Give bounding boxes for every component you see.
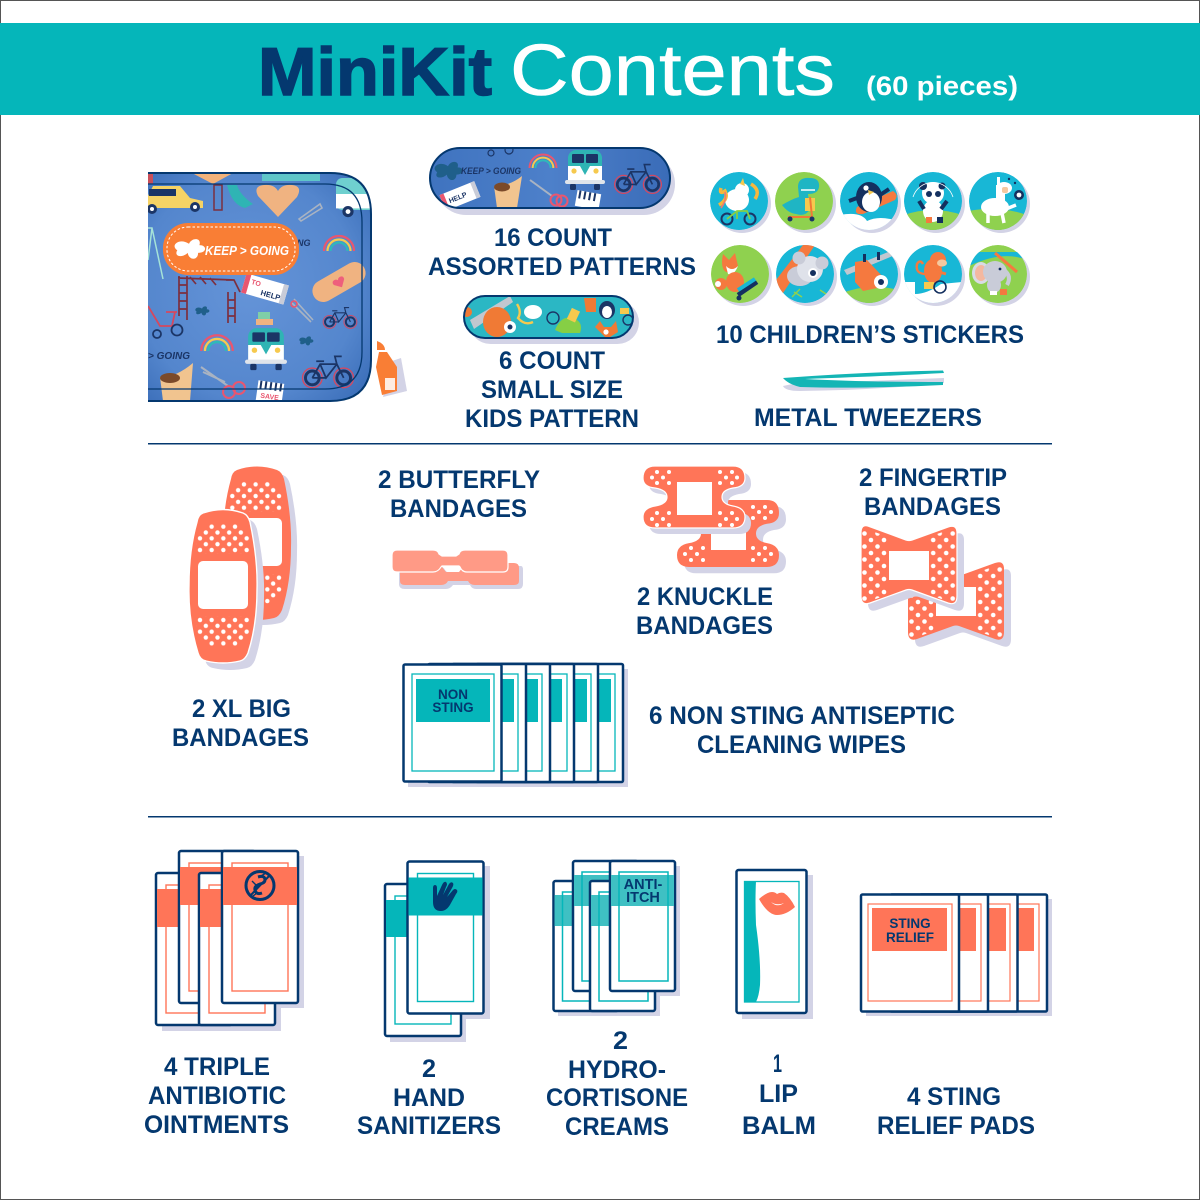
sticker: llama <box>969 172 1030 233</box>
relief pad 2 <box>890 894 988 1012</box>
label: 2 hand sanitizers: 2 <box>422 1055 436 1083</box>
label: 6 count small size kids pattern: 6 COUNT <box>499 347 605 375</box>
pouch pattern: bandage heart <box>256 185 299 217</box>
pouch stitch line <box>148 184 362 389</box>
label: 2 knuckle bandages: BANDAGES <box>636 612 773 640</box>
cream packet 3 <box>590 881 655 1011</box>
label: 2 hydrocortisone creams <box>546 1027 688 1141</box>
header banner <box>0 23 1200 115</box>
pouch pattern: save sign: SAVE <box>260 393 279 402</box>
pouch pattern: safety pins <box>291 204 322 322</box>
pouch pattern: rainbow lower <box>201 335 233 351</box>
label: 2 XL big bandages <box>172 695 309 752</box>
wipe packet 2 <box>428 664 526 782</box>
sticker: elephant <box>969 245 1030 306</box>
label: 2 knuckle bandages: 2 KNUCKLE <box>637 583 773 611</box>
label: 2 hydrocortisone creams: CREAMS <box>565 1113 669 1141</box>
icon: lip balm <box>736 870 813 1019</box>
sticker: unicorn <box>710 172 771 233</box>
icon: butterfly bandages <box>392 550 523 589</box>
label: 6 non sting antiseptic cleaning wipes <box>649 702 955 759</box>
pouch orange label <box>163 223 299 275</box>
kit pouch illustration <box>147 173 376 404</box>
wipe packet front: STING <box>432 700 474 715</box>
pouch pattern: bicycle <box>303 356 353 388</box>
pouch pattern: yellow car <box>147 186 203 214</box>
pouch pattern: van with luggage <box>245 312 287 370</box>
label: 4 triple antibiotic ointments <box>144 1053 289 1139</box>
title: MiniKit: MiniKit <box>258 34 492 110</box>
cream packet 4 <box>610 861 675 991</box>
pouch pattern: roll of paper <box>160 363 193 401</box>
label: 2 fingertip bandages: 2 FINGERTIP <box>859 464 1007 492</box>
label: 4 sting relief pads: 4 STING <box>907 1083 1001 1111</box>
label: 2 hydrocortisone creams: HYDRO- <box>568 1056 666 1084</box>
wipe packet 3 <box>452 664 550 782</box>
label: 4 sting relief pads <box>877 1083 1035 1140</box>
stickers grid <box>710 172 1030 306</box>
label: 6 non sting antiseptic cleaning wipes: CLEANING WIPES <box>697 731 906 759</box>
label: 2 hydrocortisone creams: 2 <box>613 1027 628 1055</box>
title: piece count: (60 pieces) <box>866 71 1018 101</box>
ointment packet 4 <box>222 851 298 1003</box>
label: 6 count small size kids pattern <box>465 347 639 433</box>
sanitizer packet front <box>408 862 484 1014</box>
relief pad 4 <box>949 894 1047 1012</box>
relief pad front <box>861 894 959 1012</box>
pouch pattern: rainbow <box>324 236 354 251</box>
icon: hand <box>433 882 457 911</box>
sticker: fox <box>711 245 772 306</box>
label: 2 hand sanitizers: HAND <box>393 1084 465 1112</box>
icon: knuckle bandages <box>643 466 786 573</box>
icon: XL bandages <box>189 466 297 670</box>
wipe packet 6 <box>524 664 623 782</box>
label: 10 children's stickers: 10 CHILDREN’S STICKERS <box>716 321 1024 349</box>
wipe packet 4 <box>476 664 574 782</box>
icon: ointment tube <box>376 341 407 397</box>
bandage: 6 count kids pattern <box>462 296 639 344</box>
label: 6 count small size kids pattern: KIDS PATTERN <box>465 405 639 433</box>
label: 16 count assorted patterns: 16 COUNT <box>494 224 612 252</box>
cream packet 2 <box>573 861 638 991</box>
label: 1 lip balm: 1 <box>773 1050 782 1078</box>
relief pad front: RELIEF <box>886 930 934 945</box>
label: 16 count assorted patterns <box>428 224 696 281</box>
wipe packet front <box>404 664 502 782</box>
label: metal tweezers: METAL TWEEZERS <box>754 404 982 432</box>
title: Contents: Contents <box>510 31 835 111</box>
icon: antiseptic wipes stack <box>404 664 628 787</box>
label: 2 hand sanitizers <box>357 1055 501 1140</box>
relief pad front: STING <box>889 916 931 931</box>
label: 2 knuckle bandages <box>636 583 773 640</box>
label: 4 triple antibiotic ointments: OINTMENTS <box>144 1111 289 1139</box>
label: 6 non sting antiseptic cleaning wipes: 6 NON STING ANTISEPTIC <box>649 702 955 730</box>
pouch pattern: scissors <box>201 367 245 398</box>
pouch pattern: designed to help sign: HELP <box>260 288 281 302</box>
label: 6 count small size kids pattern: SMALL SIZE <box>481 376 623 404</box>
label: 2 fingertip bandages: BANDAGES <box>864 493 1001 521</box>
bandage: 16 count assorted: HELP <box>448 192 468 205</box>
pouch pattern: monkey bars <box>178 276 240 323</box>
pouch pattern: going text: > GOING <box>148 350 190 362</box>
pouch pattern: designed to help sign <box>241 273 289 305</box>
ointment packet 2 <box>179 851 255 1003</box>
sticker: panda <box>904 172 965 233</box>
sticker: koala <box>776 245 837 306</box>
label: 4 triple antibiotic ointments: ANTIBIOTIC <box>148 1082 286 1110</box>
relief pad 3 <box>920 894 1018 1012</box>
label: 1 lip balm: BALM <box>742 1112 816 1140</box>
icon: triple antibiotic ointments <box>156 851 304 1031</box>
label: 2 butterfly bandages: 2 BUTTERFLY <box>378 466 540 494</box>
label: 2 hydrocortisone creams: CORTISONE <box>546 1084 688 1112</box>
icon: sting relief pads <box>861 894 1052 1016</box>
pouch pattern: save sign <box>256 380 284 400</box>
pouch pattern: green bike <box>323 308 357 328</box>
divider <box>148 443 1052 444</box>
icon: metal tweezers <box>783 370 944 391</box>
pouch pattern: van top right <box>336 178 370 218</box>
label: 1 lip balm: LIP <box>759 1080 798 1108</box>
sticker: monkey <box>904 245 965 306</box>
label: 4 sting relief pads: RELIEF PADS <box>877 1112 1035 1140</box>
ointment packet 3 <box>199 873 275 1025</box>
wipe packet 5 <box>500 664 598 782</box>
ointment packet 1 <box>156 873 232 1025</box>
wipe packet front: NON <box>438 687 468 702</box>
pouch pattern: text fragment: NG <box>297 238 310 248</box>
icon: fingertip bandages <box>861 526 1011 647</box>
icon: hydrocortisone creams <box>554 861 680 1016</box>
label: 2 XL big bandages: BANDAGES <box>172 724 309 752</box>
icon: hand sanitizers <box>385 862 490 1042</box>
pouch pattern: butterfly logos <box>195 306 313 346</box>
label: 4 triple antibiotic ointments: 4 TRIPLE <box>164 1053 270 1081</box>
label: 2 hand sanitizers: SANITIZERS <box>357 1112 501 1140</box>
pouch pattern: designed to help sign: TO <box>250 279 262 289</box>
cream packet 1 <box>554 881 618 1011</box>
cream packet 4: ANTI- <box>624 877 662 893</box>
label: 2 butterfly bandages <box>378 466 540 523</box>
sticker: dinosaur <box>775 172 836 233</box>
pouch pattern: swing <box>148 228 163 279</box>
label: 16 count assorted patterns: ASSORTED PATTERNS <box>428 253 696 281</box>
bandage: 16 count assorted <box>430 146 675 215</box>
label: 2 fingertip bandages <box>859 464 1007 521</box>
pouch pattern: tricycle <box>148 306 182 338</box>
label: 1 lip balm <box>742 1050 816 1140</box>
label: 2 butterfly bandages: BANDAGES <box>390 495 527 523</box>
pouch pattern: bandage <box>312 262 366 302</box>
icon: lips <box>759 892 795 915</box>
pouch outline <box>148 173 371 401</box>
pouch orange label: KEEP > GOING <box>205 244 289 258</box>
pouch pattern: top heart and slide <box>148 173 320 210</box>
bandage: 16 count assorted: KEEP > GOING <box>461 166 521 176</box>
cream packet 4: ITCH <box>626 890 660 906</box>
sticker: sloth <box>840 245 901 306</box>
sticker: penguin <box>840 172 901 233</box>
divider <box>148 816 1052 818</box>
label: 2 XL big bandages: 2 XL BIG <box>192 695 291 723</box>
sanitizer packet back <box>385 884 461 1036</box>
icon: no germs <box>246 872 274 900</box>
